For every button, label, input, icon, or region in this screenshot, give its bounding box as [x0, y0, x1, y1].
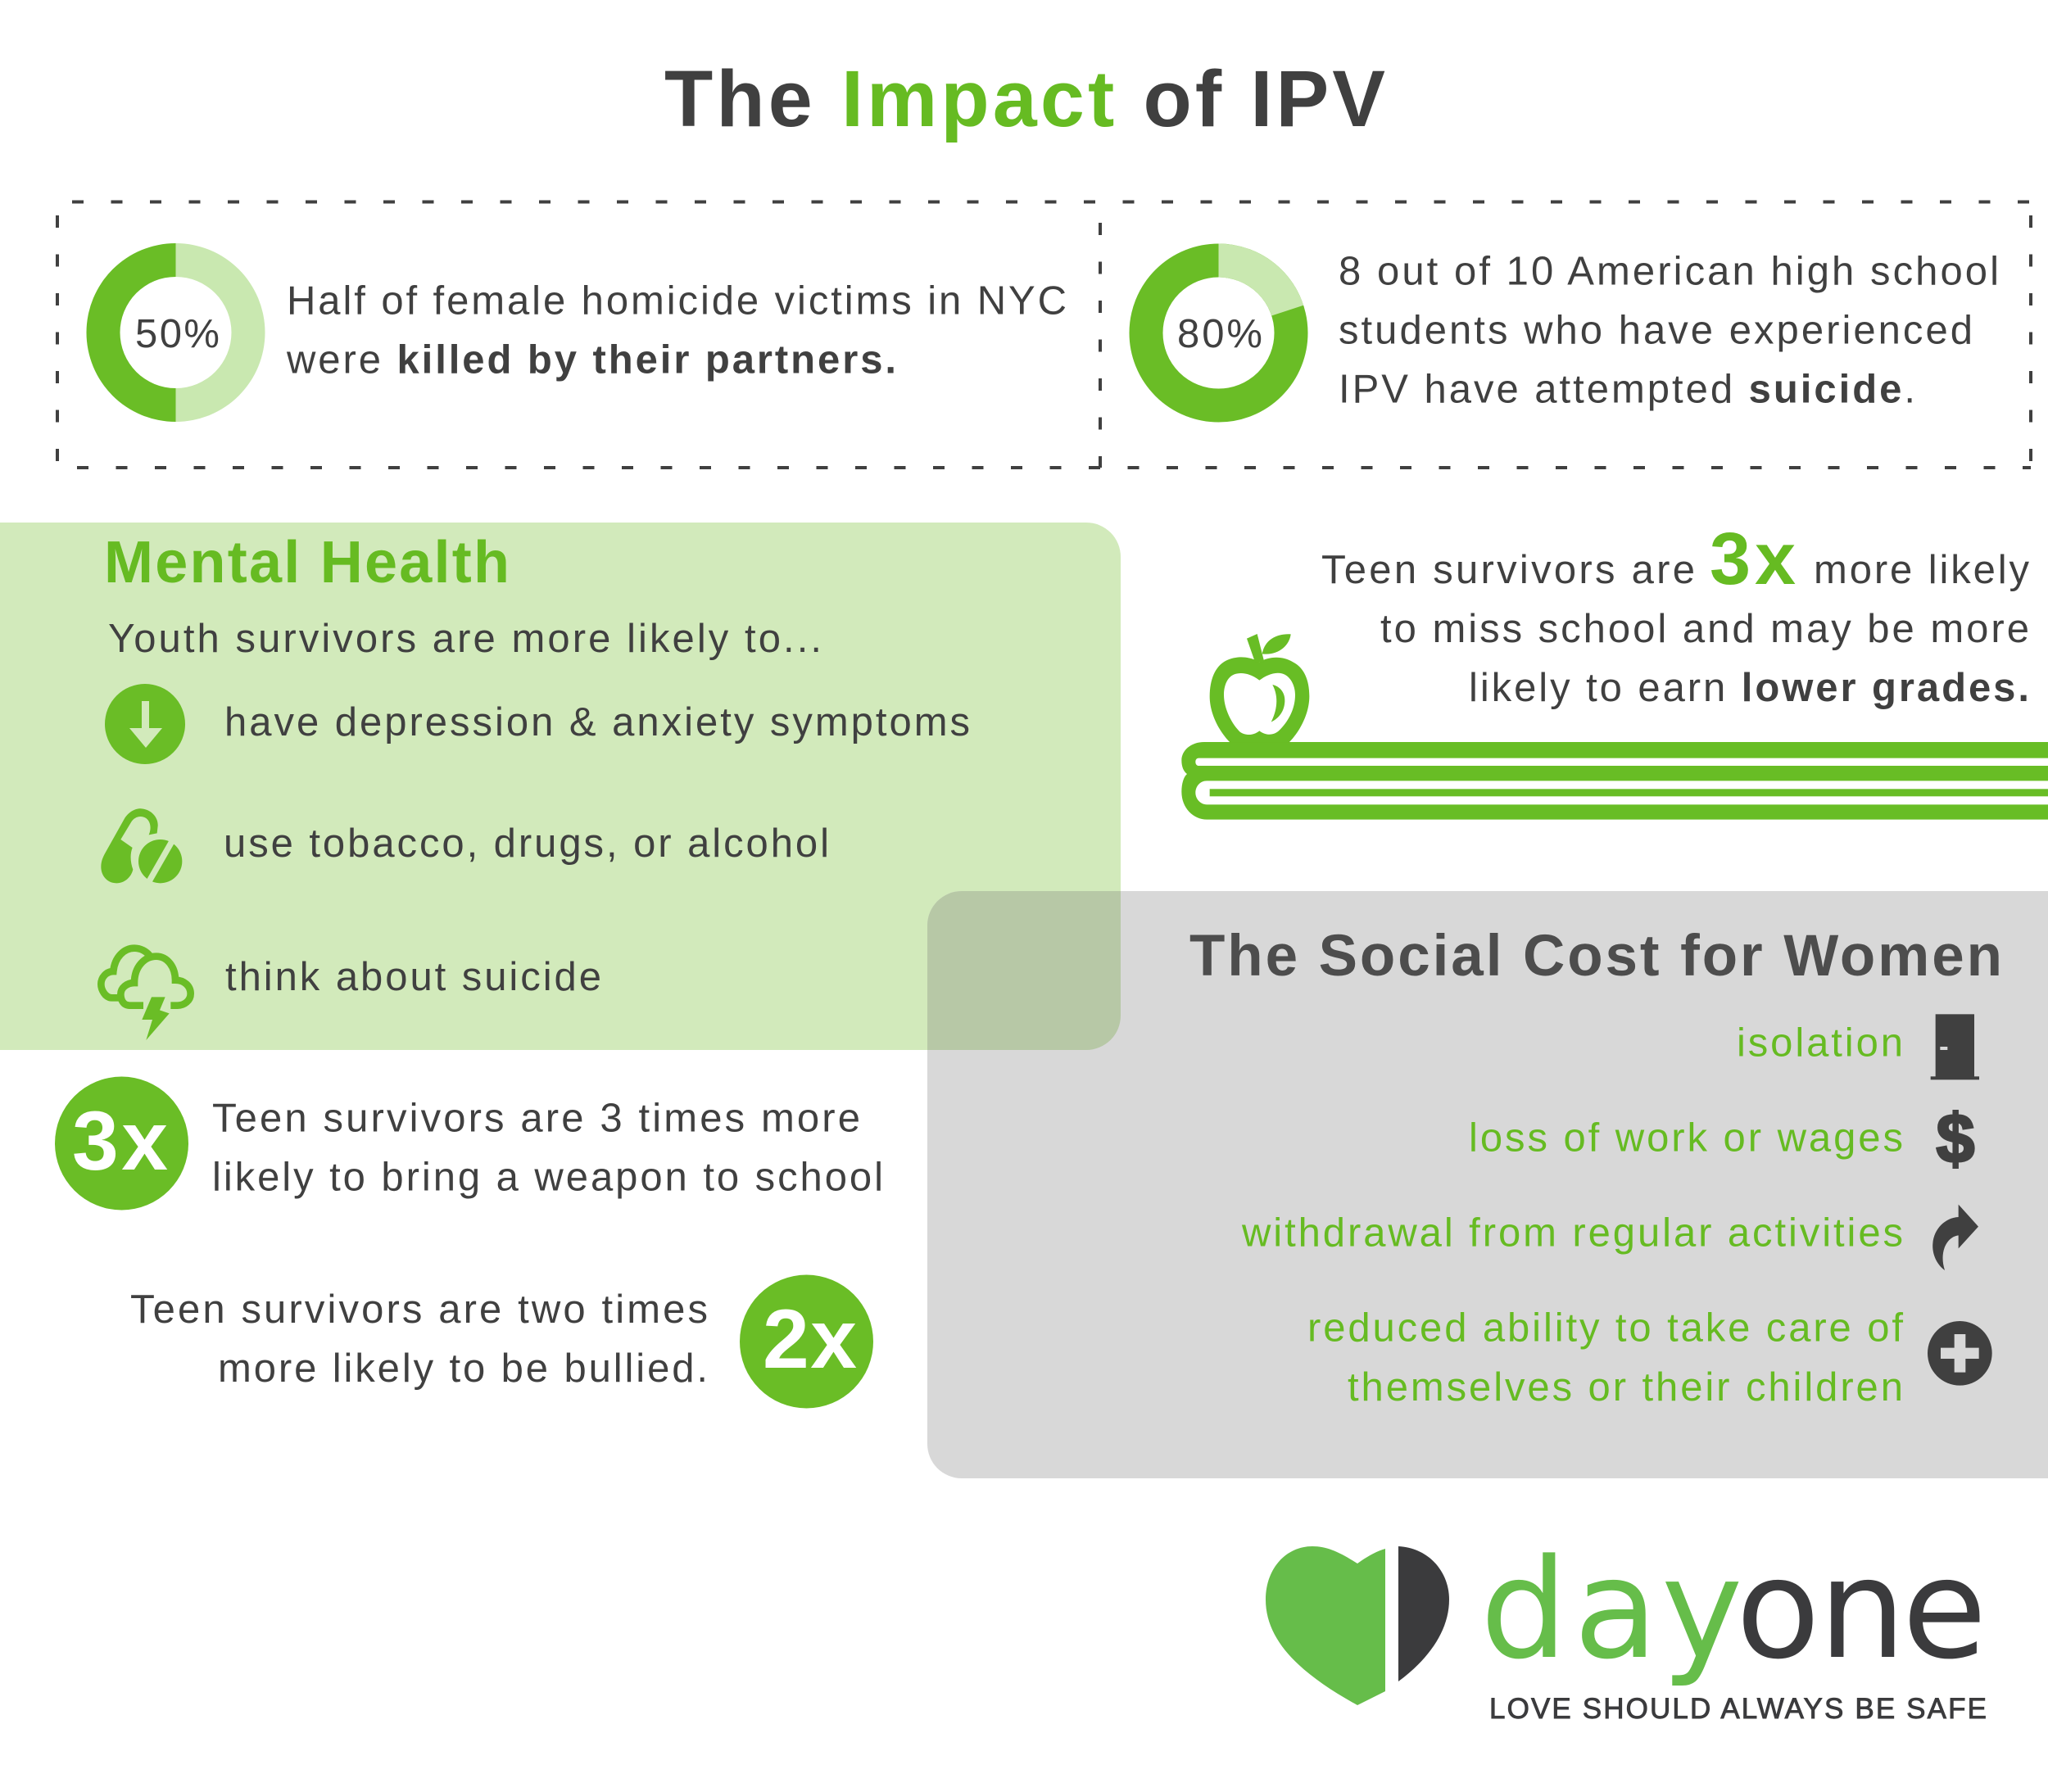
icon: dollar sign: $ — [1937, 1100, 1974, 1177]
donut chart: 50%: 50% — [135, 312, 220, 356]
text: reduced ability: reduced ability to take care of — [1307, 1306, 1903, 1350]
text: reduced ability: themselves or their children — [1348, 1365, 1903, 1410]
text: loss of work: loss of work or wages — [1469, 1115, 1903, 1160]
wordmark — [1480, 1529, 1987, 1690]
panel: mental health — [0, 523, 1121, 1050]
icon: down arrow circle — [105, 684, 185, 764]
stat: 2x bullied — [130, 1274, 873, 1409]
text: suicide statistic: students who have experienced — [1339, 308, 1973, 352]
text: suicide statistic — [1339, 249, 1999, 411]
badge: 2x — [740, 1274, 873, 1409]
text: homicide statistic: were killed by their partners. — [286, 337, 896, 382]
text: weapon statistic: Teen survivors are 3 times more — [212, 1096, 860, 1140]
icon: heart — [1266, 1546, 1449, 1705]
stat: 3x miss school: to miss school and may be more — [1380, 607, 2029, 651]
text: homicide statistic: Half of female homicide victims in NYC — [287, 278, 1067, 323]
icon: books — [1181, 742, 2048, 820]
text: homicide statistic — [286, 278, 1067, 382]
icon: storm cloud — [101, 948, 191, 1040]
icon: pills — [101, 808, 182, 883]
stat: 3x miss school: 3x — [1710, 518, 1796, 600]
badge: 3x: 3x — [72, 1094, 168, 1188]
text: isolation: isolation — [1737, 1020, 1903, 1065]
heading: social cost: The Social Cost for Women — [1189, 924, 2002, 989]
text: weapon statistic — [212, 1096, 883, 1199]
stat: 80 percent suicide — [1146, 243, 1999, 411]
stat: 3x miss school: Teen survivors are — [1321, 548, 1695, 592]
text: substance use: use tobacco, drugs, or alcohol — [224, 821, 829, 866]
donut chart: 50% — [86, 243, 265, 422]
text: intro: Youth survivors are more likely to... — [108, 617, 822, 661]
text: bullying statistic: more likely to be bullied. — [218, 1346, 708, 1391]
text: suicidal thoughts: think about suicide — [225, 955, 601, 999]
text: suicide statistic: 8 out of 10 American high school — [1339, 249, 1999, 293]
donut chart: 80%: 80% — [1177, 312, 1262, 356]
text: reduced ability — [1307, 1306, 1903, 1410]
heading: mental health: Mental Health — [104, 530, 510, 595]
text: depression: have depression & anxiety symptoms — [224, 700, 970, 744]
stat: 50 percent homicide — [86, 243, 1067, 422]
text: suicide statistic: IPV have attempted suicide. — [1339, 367, 1915, 411]
text: withdrawal: withdrawal from regular activities — [1241, 1211, 1903, 1255]
stat: 3x miss school: likely to earn lower grades. — [1469, 666, 2029, 710]
text: bullying statistic: Teen survivors are two times — [130, 1287, 708, 1332]
icon: apple on books — [1181, 634, 2048, 820]
donut chart: 80% — [1146, 243, 1303, 405]
text: bullying statistic — [130, 1287, 708, 1391]
stat: 3x miss school — [1321, 518, 2030, 710]
icon: apple — [1210, 634, 1309, 743]
icon: door — [1931, 1014, 1979, 1079]
stat: 3x weapon — [55, 1076, 883, 1211]
icon: curved arrow — [1932, 1205, 1978, 1270]
tagline: LOVE SHOULD ALWAYS BE SAFE — [1489, 1693, 1987, 1725]
wordmark: one — [1736, 1529, 1987, 1690]
panel: social cost for women — [927, 891, 2048, 1478]
badge: 2x: 2x — [763, 1292, 857, 1386]
stat: 3x miss school: more likely — [1814, 548, 2030, 592]
title: The Impact of IPV — [664, 54, 1385, 143]
logo: day one — [1266, 1529, 1987, 1725]
panel: top statistics dashed frame — [57, 201, 2031, 468]
badge: 3x — [55, 1076, 188, 1211]
wordmark: day — [1480, 1529, 1742, 1690]
text: weapon statistic: likely to bring a weapon to school — [212, 1155, 883, 1199]
icon: plus circle — [1928, 1321, 1992, 1386]
